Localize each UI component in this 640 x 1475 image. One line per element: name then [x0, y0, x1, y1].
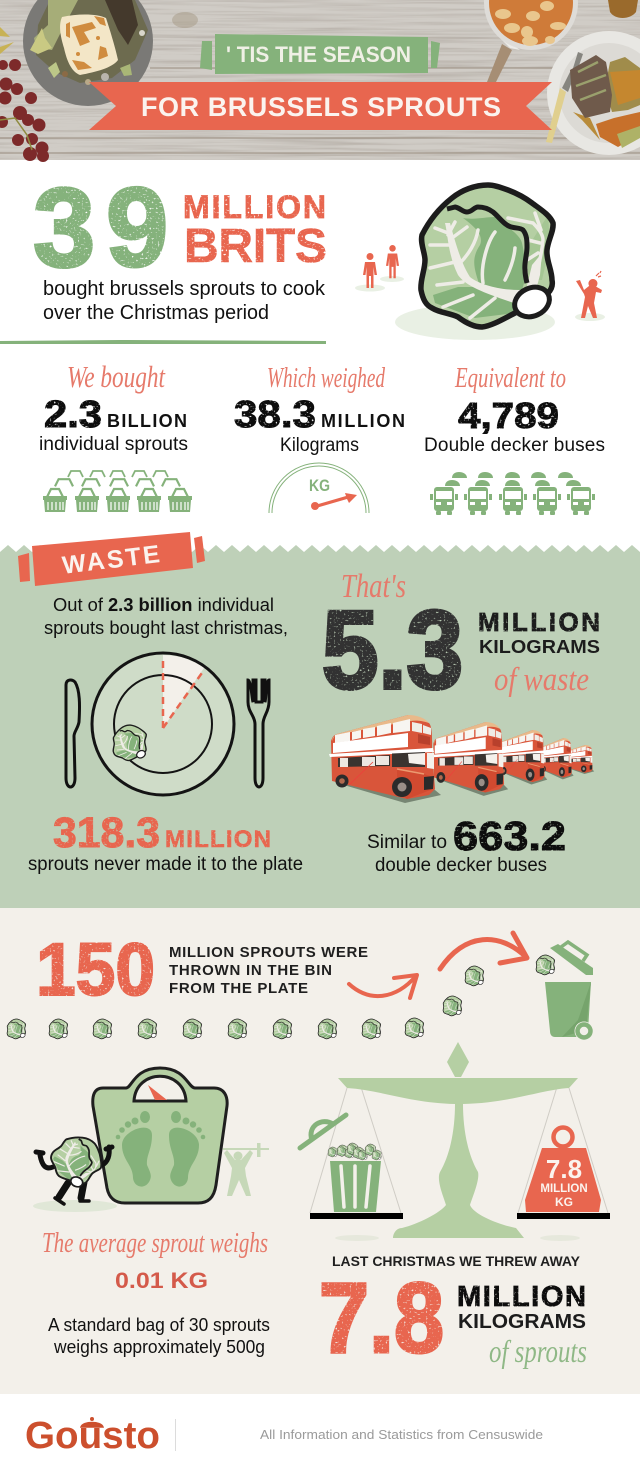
weight figure: 7.8	[546, 1154, 582, 1184]
figure: 0.01 KG	[115, 1268, 208, 1293]
script heading: Which weighed	[267, 362, 385, 394]
figure: 4,789	[458, 395, 559, 436]
herb leaves	[0, 27, 14, 54]
logo: Gousto: Gousto	[25, 1415, 160, 1457]
figure: 38.3	[234, 394, 316, 436]
million: MILLION	[183, 189, 326, 225]
icon: 7.8 million kg weight	[525, 1128, 601, 1212]
arrow: first swoosh	[349, 975, 417, 998]
caption: sprouts never made it to the plate	[28, 854, 303, 875]
script: of waste	[494, 662, 589, 698]
title line one: ' TIS THE SEASON	[226, 42, 411, 67]
waste stat: 5.3 million kilograms	[322, 568, 600, 712]
icon: fork	[248, 680, 269, 787]
illustration: row of double decker buses	[329, 715, 594, 803]
grapes	[0, 59, 49, 162]
right plate with steak	[546, 31, 640, 155]
script: of sprouts	[489, 1333, 587, 1369]
strings	[310, 1087, 608, 1213]
million: MILLION	[457, 1281, 586, 1313]
figure: 663.2	[453, 813, 566, 859]
figure: 2.3	[44, 394, 102, 436]
green title ribbon	[200, 34, 440, 74]
icon: knife	[66, 680, 80, 787]
stat: similar to 663.2 buses	[367, 813, 566, 876]
source credit: All Information and Statistics from Censuswide	[260, 1427, 543, 1442]
finial	[447, 1042, 469, 1077]
pan shadows	[335, 1235, 379, 1241]
title line two: FOR BRUSSELS SPROUTS	[141, 92, 501, 122]
footer divider	[175, 1419, 176, 1451]
detail line one: A standard bag of 30 sprouts	[48, 1315, 270, 1335]
needle	[311, 493, 357, 510]
icon: rows of baskets	[43, 471, 192, 512]
stat: 7.8 million kilograms thrown away	[319, 1253, 587, 1373]
script heading: The average sprout weighs	[42, 1227, 268, 1259]
kilograms: KILOGRAMS	[458, 1311, 586, 1333]
icon: plate with missing slice	[92, 653, 234, 795]
left plate with halloumi	[23, 0, 153, 106]
weight unit: MILLION	[540, 1183, 588, 1195]
caption: Kilograms	[280, 435, 359, 456]
script heading: We bought	[67, 359, 166, 394]
icon: rows of buses	[430, 472, 595, 515]
icon: balance scales	[310, 1042, 610, 1241]
green divider line	[0, 340, 326, 344]
waste ribbon	[18, 532, 205, 586]
stat: 318.3 million sprouts	[28, 809, 303, 875]
text: average sprout weight	[42, 1227, 270, 1357]
figure: 150	[36, 928, 155, 1011]
caption: double decker buses	[375, 855, 547, 876]
small jar	[608, 0, 638, 18]
unit: MILLION	[165, 826, 271, 853]
unit: BILLION	[107, 411, 187, 431]
icon: giant brussels sprout	[395, 185, 555, 340]
text line three: FROM THE PLATE	[169, 980, 308, 997]
figure: 5.3	[322, 589, 463, 712]
header photo of rustic table and dishes	[0, 0, 640, 162]
kilograms: KILOGRAMS	[479, 636, 600, 657]
beam and pillar	[338, 1078, 578, 1238]
unit: MILLION	[321, 411, 405, 431]
text line two: THROWN IN THE BIN	[169, 962, 332, 979]
Brits: BRITS	[184, 220, 327, 273]
gauge label: KG	[309, 476, 330, 495]
caption: individual sprouts	[39, 434, 188, 455]
saucepan of beans	[484, 0, 578, 82]
script heading: That's	[341, 568, 406, 605]
arrow: second swoosh	[440, 933, 527, 969]
lead-in: LAST CHRISTMAS WE THREW AWAY	[332, 1253, 581, 1269]
icon: bin full of sprouts on left pan	[300, 1115, 381, 1212]
figure: 7.8	[319, 1262, 444, 1373]
headline stat: 39 million Brits	[33, 165, 327, 300]
detail line two: weighs approximately 500g	[53, 1337, 265, 1357]
million: MILLION	[478, 607, 600, 637]
stat column: we bought	[39, 359, 188, 455]
panel: waste	[0, 545, 640, 908]
stat column: which weighed	[234, 362, 405, 456]
footprints	[116, 1111, 205, 1187]
icon: bathroom scales	[93, 1068, 227, 1203]
scattered spice on table	[172, 12, 198, 28]
dial	[134, 1076, 186, 1101]
figure: 318.3	[53, 809, 160, 857]
ribbon label: WASTE	[61, 540, 161, 580]
sprouts rolling to the bin	[7, 955, 555, 1039]
red title ribbon	[89, 82, 552, 130]
intro text: Out of 2.3 billion individual	[53, 595, 274, 615]
icon: weighing gauge	[269, 463, 369, 513]
number 39: 39	[33, 165, 168, 290]
icon: strong sprout character	[33, 1127, 117, 1212]
stat: 150 million in the bin	[36, 928, 368, 1011]
weight unit two: KG	[555, 1195, 573, 1209]
script heading: Equivalent to	[454, 362, 566, 394]
lead-in: Similar to	[367, 832, 447, 853]
description: bought brussels sprouts to cook	[43, 278, 326, 300]
caption: Double decker buses	[424, 435, 605, 456]
icon: green bin	[545, 942, 594, 1040]
icon: people looking at sprout	[355, 245, 605, 321]
stat column: equivalent to	[424, 362, 605, 456]
pans	[310, 1213, 403, 1219]
text line one: MILLION SPROUTS WERE	[169, 944, 368, 961]
description line two: over the Christmas period	[43, 302, 269, 324]
intro text line two: sprouts bought last christmas,	[44, 618, 288, 638]
panel: cream lower section	[0, 908, 640, 1394]
icon: weightlifter silhouette	[223, 1143, 269, 1196]
